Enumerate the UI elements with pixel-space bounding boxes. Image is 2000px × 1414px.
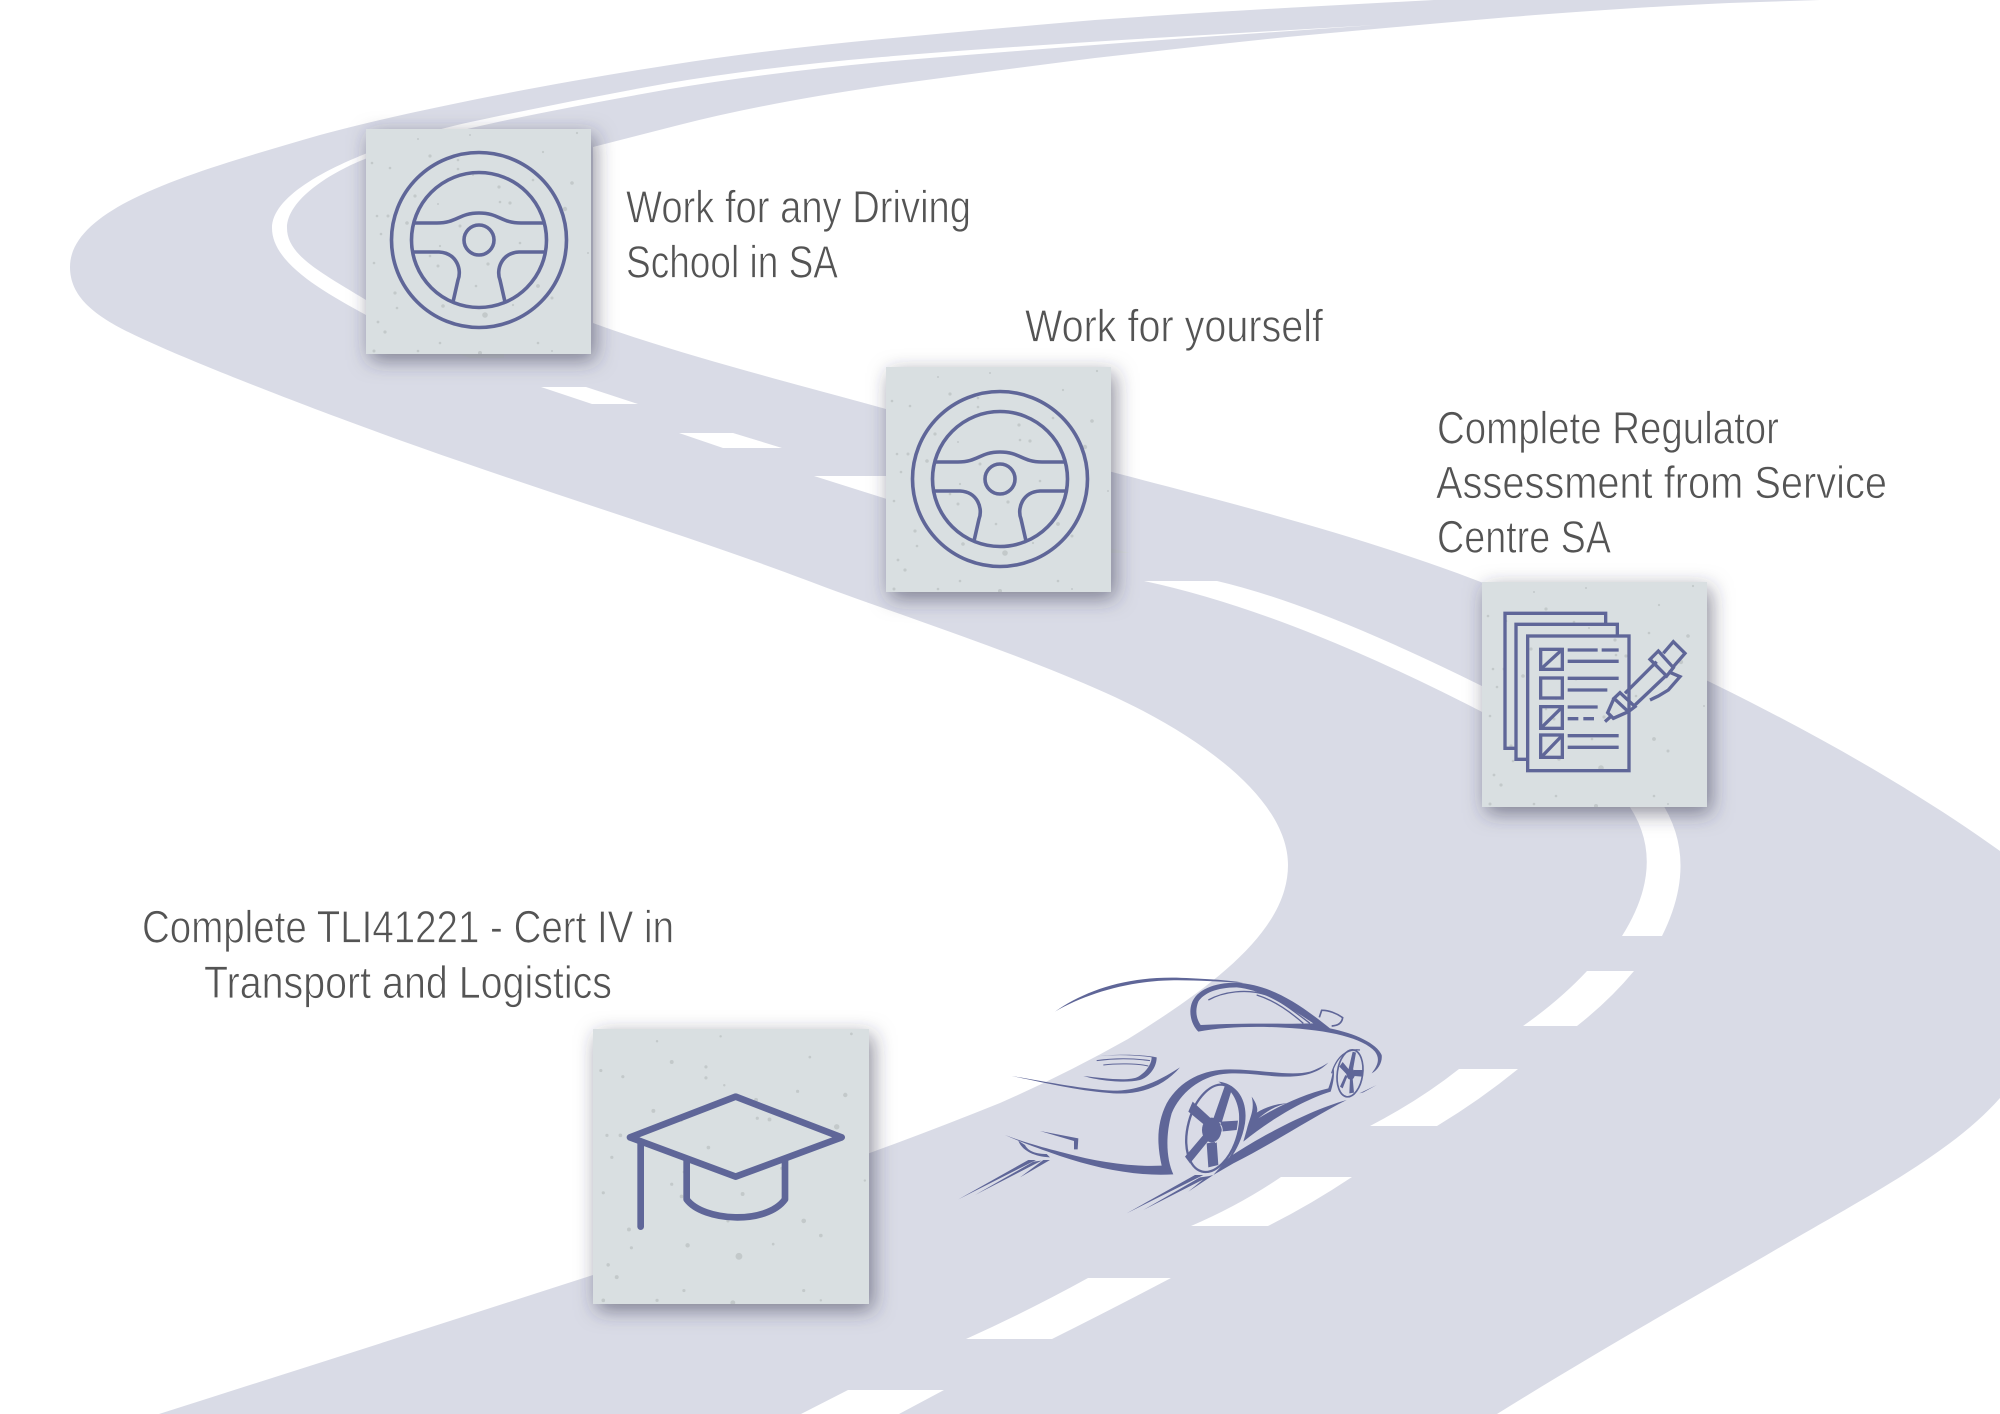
car front wheel [1332, 1048, 1366, 1099]
step card: Complete Regulator Assessment [1482, 582, 1707, 808]
label: Complete TLI41221 - Cert IV in Transport and Logistics: Complete TLI41221 - Cert IV in [142, 902, 674, 952]
car speed streaks [958, 1085, 1377, 1213]
label: Work for any Driving School in SA: Work for any Driving [626, 182, 971, 232]
label: Complete Regulator Assessment from Service Centre SA: Complete Regulator [1437, 402, 1779, 454]
step card: Complete TLI41221 [593, 1029, 869, 1305]
icon: steering wheel [392, 152, 566, 328]
card background [366, 129, 591, 354]
step card: Work for yourself [886, 367, 1111, 593]
car mirror [1319, 1010, 1343, 1026]
car rear fender line [1012, 1067, 1180, 1094]
label: Work for any Driving School in SA: School in SA [626, 236, 838, 288]
label: Work for yourself: Work for yourself [1025, 300, 1323, 352]
small marking remnants [456, 353, 1130, 553]
label: Complete Regulator Assessment from Service Centre SA [1436, 402, 1887, 562]
road markings [272, 25, 1681, 1414]
car ground shadow [1213, 1100, 1347, 1175]
card background [593, 1029, 869, 1304]
car sill [1243, 1067, 1334, 1142]
car body side [1005, 1063, 1328, 1175]
label: Complete TLI41221 - Cert IV in Transport and Logistics: Transport and Logistics [204, 957, 612, 1008]
label: Work for any Driving School in SA [626, 182, 971, 288]
car cabin and bonnet [1190, 983, 1382, 1073]
card background [886, 367, 1111, 592]
card background [1482, 582, 1707, 807]
step card: Work for any Driving School in SA [366, 129, 591, 355]
car tail light [1083, 1055, 1157, 1082]
label: Complete TLI41221 - Cert IV in Transport and Logistics [142, 902, 674, 1008]
icon: checklist and pen [1505, 613, 1685, 771]
icon: graduation cap [630, 1097, 842, 1227]
car illustration [958, 978, 1382, 1213]
car bumper [1018, 1131, 1078, 1157]
car window trim [1208, 991, 1310, 1023]
label: Complete Regulator Assessment from Service Centre SA: Centre SA [1437, 512, 1611, 562]
car roof swoosh [1055, 978, 1243, 1012]
car rear wheel [1177, 1079, 1249, 1178]
icon: steering wheel [912, 392, 1088, 566]
label: Complete Regulator Assessment from Service Centre SA: Assessment from Service [1436, 457, 1887, 508]
